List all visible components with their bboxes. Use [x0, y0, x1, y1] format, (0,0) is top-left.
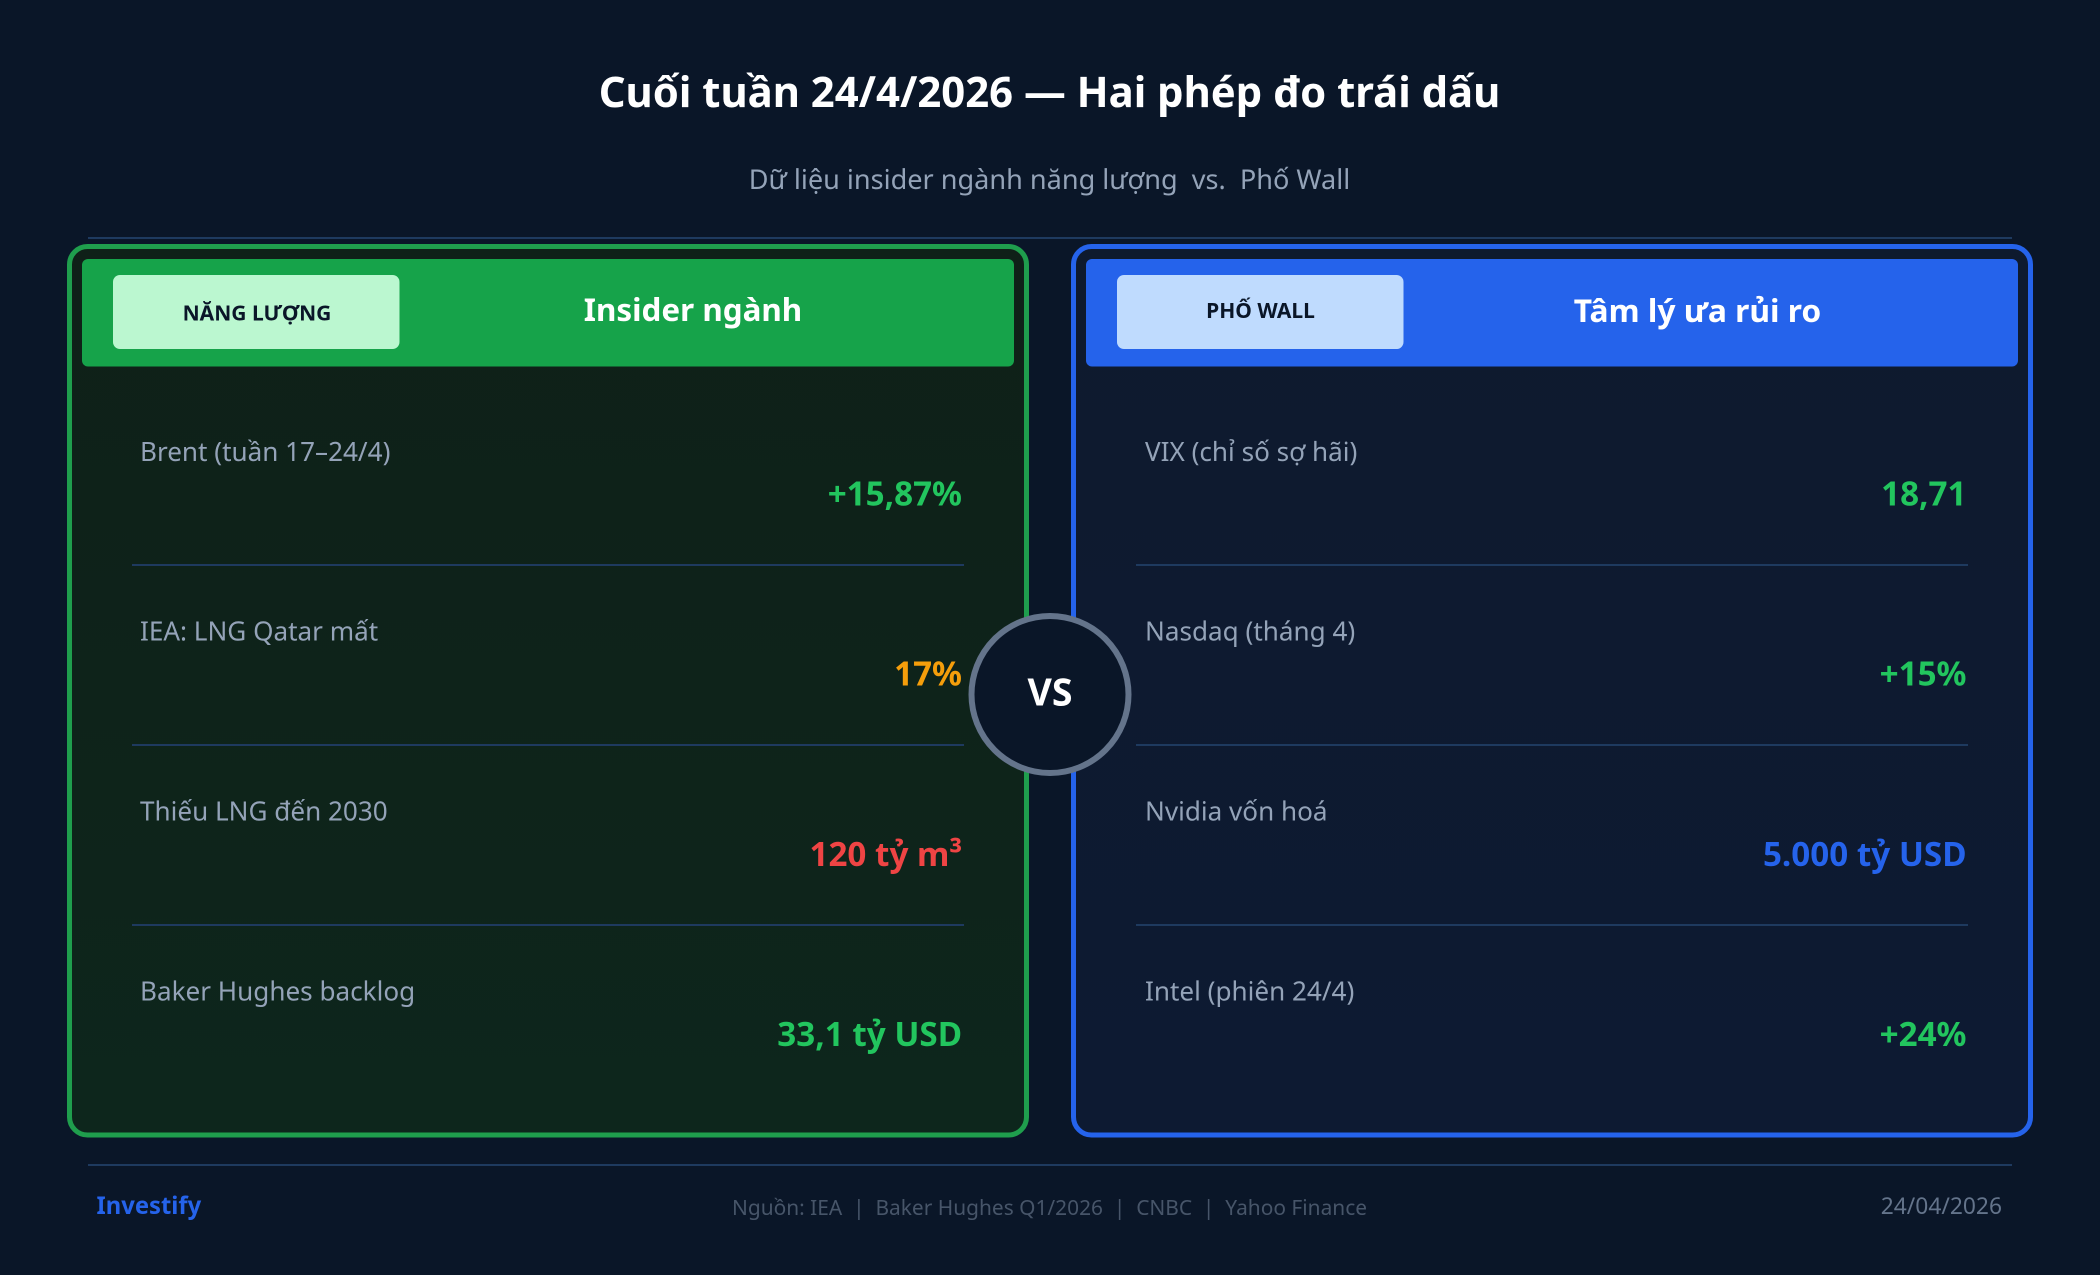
- row: brent: [140, 433, 962, 516]
- panel: wall street: [1074, 246, 2030, 1135]
- subtitle: Dữ liệu insider ngành năng lượng vs. Phố Wall: [749, 160, 1350, 197]
- panel: energy insider: [70, 246, 1026, 1135]
- row: baker hughes: Baker Hughes backlog: [140, 972, 415, 1008]
- row: nvidia: 5.000 tỷ USD: [1763, 831, 1966, 876]
- row: brent: +15,87%: [828, 470, 962, 516]
- row: lng shortage: Thiếu LNG đến 2030: [140, 792, 388, 828]
- row: nasdaq: Nasdaq (tháng 4): [1145, 612, 1355, 648]
- row: lng qatar: 17%: [894, 650, 962, 696]
- badge: năng lượng: [113, 275, 400, 349]
- badge: phố wall: PHỐ WALL: [1206, 296, 1315, 325]
- row: baker hughes: 33,1 tỷ USD: [777, 1011, 962, 1056]
- row: intel: Intel (phiên 24/4): [1145, 972, 1354, 1008]
- row: lng qatar: IEA: LNG Qatar mất: [140, 612, 378, 648]
- row: brent: Brent (tuần 17–24/4): [140, 433, 390, 469]
- row: vix: 18,71: [1881, 470, 1966, 516]
- heading: insider ngành: Insider ngành: [584, 288, 802, 331]
- row: intel: [1145, 972, 1966, 1056]
- row: nvidia: Nvidia vốn hoá: [1145, 792, 1328, 828]
- row: lng qatar: [140, 612, 962, 696]
- vs badge: [972, 616, 1128, 773]
- footer sources: Nguồn: IEA | Baker Hughes Q1/2026 | CNBC | Yahoo Finance: [732, 1194, 1367, 1222]
- panel header: wall street: [1086, 259, 2018, 366]
- row: nasdaq: +15%: [1880, 650, 1966, 696]
- row: baker hughes: [140, 972, 962, 1056]
- badge: năng lượng: NĂNG LƯỢNG: [183, 300, 331, 328]
- footer date: 24/04/2026: [1881, 1190, 2002, 1221]
- badge: phố wall: [1117, 275, 1404, 349]
- row: vix: VIX (chỉ số sợ hãi): [1145, 433, 1357, 469]
- vs badge: VS: [1027, 666, 1073, 716]
- footer brand: Investify: [96, 1189, 202, 1221]
- row: vix: [1145, 433, 1966, 516]
- heading: tâm lý ưa rủi ro: Tâm lý ưa rủi ro: [1574, 289, 1821, 332]
- panel header: energy: [82, 259, 1014, 366]
- row: lng shortage: 120 tỷ m³: [809, 831, 962, 876]
- row: nvidia: [1145, 792, 1966, 876]
- row: lng shortage: [140, 792, 962, 876]
- title: Cuối tuần 24/4/2026 — Hai phép đo trái dấu: [599, 63, 1500, 120]
- row: intel: +24%: [1880, 1011, 1966, 1056]
- row: nasdaq: [1145, 612, 1966, 696]
